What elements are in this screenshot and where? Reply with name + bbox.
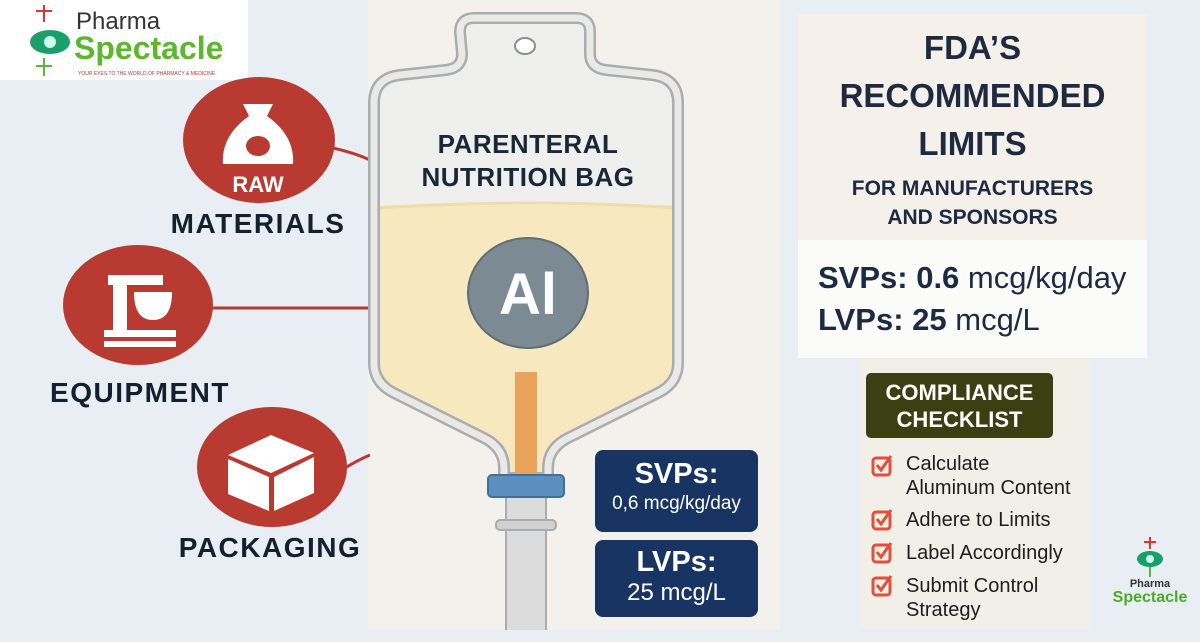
small logo: Pharma	[1130, 578, 1170, 590]
limit values: LVPs: 25 mcg/L	[818, 302, 1040, 337]
checklist panel background	[860, 360, 1090, 630]
logo	[0, 0, 248, 80]
LVP box	[595, 540, 758, 617]
LVP box: 25 mcg/L	[627, 579, 726, 606]
text: Aluminum Content	[906, 477, 1071, 499]
bag title: PARENTERAL	[438, 129, 618, 159]
heading: RECOMMENDED	[840, 77, 1105, 114]
subheading: AND SPONSORS	[887, 206, 1058, 229]
small logo	[1113, 537, 1187, 606]
subheading	[852, 177, 1093, 229]
label: materials: MATERIALS	[171, 208, 345, 239]
text: Strategy	[906, 599, 980, 621]
connectors	[212, 148, 370, 468]
subheading: FOR MANUFACTURERS	[852, 177, 1093, 200]
logo: Spectacle	[74, 30, 223, 66]
label: packaging: PACKAGING	[179, 532, 361, 563]
compliance checklist header: CHECKLIST	[897, 407, 1022, 432]
center panel background	[368, 0, 780, 630]
bag	[368, 18, 688, 505]
IV bag illustration	[368, 12, 684, 630]
SVP box: 0,6 mcg/kg/day	[612, 493, 741, 514]
AI circle	[468, 238, 588, 348]
heading: LIMITS	[918, 125, 1027, 162]
heading: FDA’S	[924, 29, 1021, 66]
text: Label Accordingly	[906, 542, 1063, 564]
icon: raw materials	[183, 77, 335, 203]
FDA limits panel	[798, 14, 1147, 358]
logo: YOUR EYES TO THE WORLD OF PHARMACY & MEDICINE	[78, 71, 215, 77]
bag title: NUTRITION BAG	[421, 162, 635, 192]
text: Adhere to Limits	[906, 509, 1051, 531]
bag title	[421, 129, 635, 192]
connector	[488, 475, 564, 497]
SVP box: SVPs:	[635, 458, 718, 490]
heading	[840, 29, 1105, 162]
checklist items	[872, 453, 1071, 621]
AI circle: Al	[499, 262, 557, 327]
limit values: SVPs: 0.6 mcg/kg/day	[818, 260, 1126, 295]
SVP box	[595, 450, 758, 532]
logo: Pharma	[76, 8, 160, 35]
icon: raw materials: RAW	[232, 172, 284, 197]
icon: equipment	[63, 245, 213, 365]
small logo: Spectacle	[1113, 589, 1187, 606]
text: Calculate	[906, 453, 989, 475]
tube	[506, 497, 546, 637]
sources diagram	[63, 77, 370, 527]
icon: packaging	[197, 407, 347, 527]
compliance checklist header	[866, 373, 1053, 438]
text: Submit Control	[906, 575, 1038, 597]
compliance checklist header: COMPLIANCE	[886, 380, 1033, 405]
limit values	[798, 240, 1147, 358]
label: equipment: EQUIPMENT	[50, 377, 230, 408]
LVP box: LVPs:	[636, 546, 717, 578]
